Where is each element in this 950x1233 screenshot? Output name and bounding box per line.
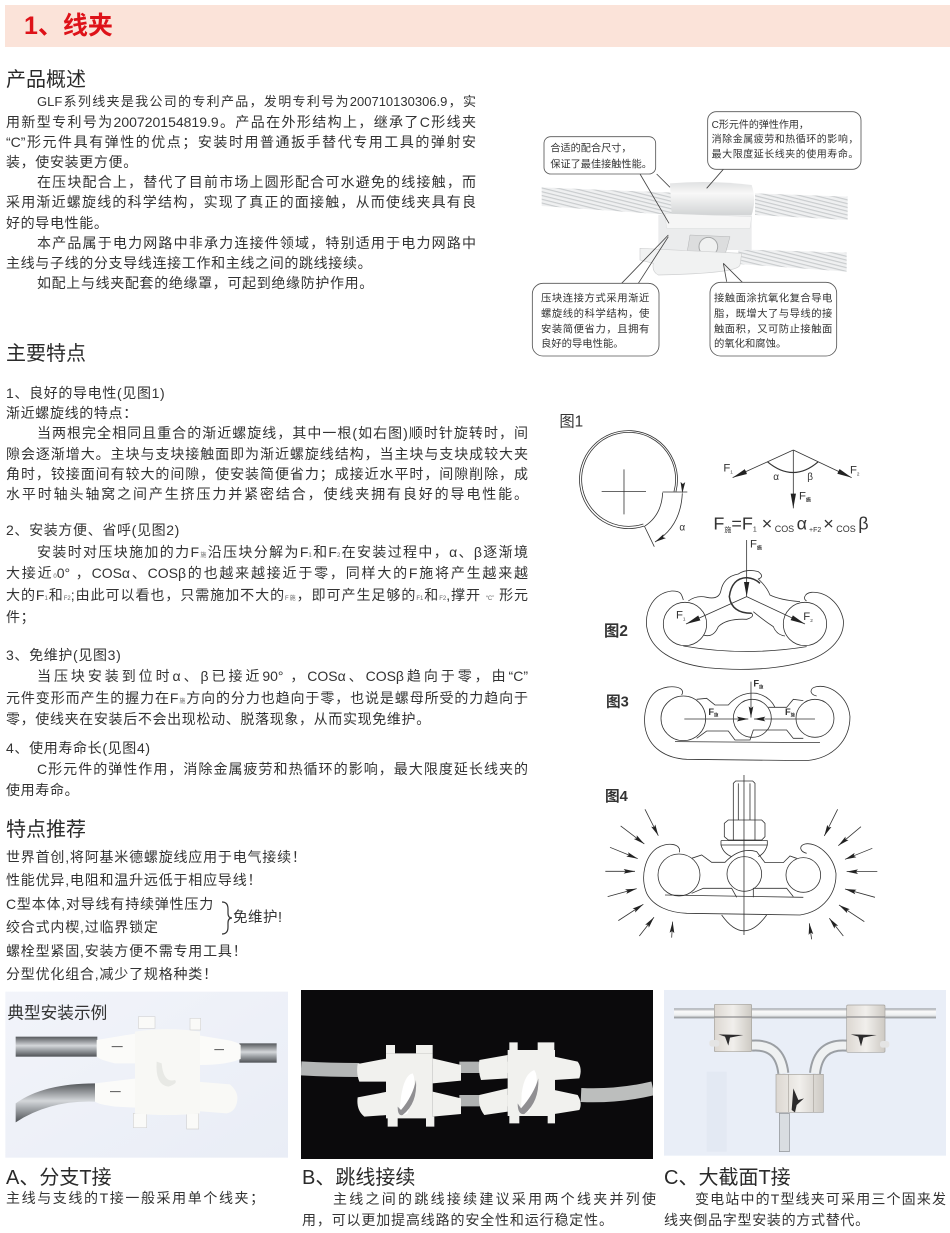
- figure 2: [604, 538, 843, 669]
- figure 3: F: [785, 707, 791, 717]
- text block: feature 4: 4、使用寿命长(见图4): [6, 740, 151, 756]
- figure 3: 施: [759, 683, 764, 690]
- text block: feature 1: 当两根完全相同且重合的渐近螺旋线，其中一根(如右图)顺时针旋转时，间: [37, 425, 528, 441]
- caption B text: [302, 1191, 656, 1228]
- caption C heading: C、大截面T接: [664, 1167, 791, 1189]
- force vectors: [723, 450, 860, 508]
- text block: product overview: 主线与子线的分支导线连接工作和主线之间的跳线接续。: [6, 255, 372, 271]
- formula: F: [713, 513, 724, 533]
- clamp body: [640, 182, 754, 275]
- photo C: large section T connection: [664, 990, 946, 1156]
- formula: ×: [823, 513, 834, 533]
- figures 3 and 4 group: [605, 679, 877, 939]
- formula: =F: [731, 513, 753, 533]
- callout: press block: 压块连接方式采用渐近: [541, 292, 649, 305]
- figure 2: 1: [683, 616, 686, 621]
- figure 3: 图3: [606, 694, 629, 711]
- figure 4: 图4: [605, 788, 629, 805]
- jumper clamp right: [479, 1042, 581, 1123]
- figure 3: F: [753, 679, 759, 689]
- title text: 1、线夹: [24, 12, 113, 40]
- figure 3: 施: [791, 712, 796, 719]
- text block: feature 3: 元件变形而产生的握力在F施方向的分力也趋向于零，也说是螺母所受的力趋向于: [6, 690, 528, 706]
- text block: feature 3: 3、免维护(见图3): [6, 647, 121, 663]
- figure 2: F: [750, 538, 757, 550]
- heading: recommended features: 特点推荐: [6, 819, 86, 841]
- formula: ×: [757, 513, 772, 533]
- formula: β: [858, 513, 869, 533]
- figure 3: [606, 679, 850, 761]
- text block: product overview: 好的导电性能。: [6, 215, 109, 231]
- caption B text: 主线之间的跳线接续建议采用两个线夹并列使: [333, 1191, 656, 1207]
- force vectors: 2: [857, 471, 860, 476]
- brace: maintenance free: [222, 901, 283, 935]
- text block: feature 4: C形元件的弹性作用，消除金属疲劳和热循环的影响，最大限度延长线夹的: [37, 761, 528, 777]
- jumper clamp left: [357, 1045, 461, 1127]
- caption C: [664, 1167, 946, 1228]
- force vectors: F: [799, 490, 806, 502]
- force vectors: 1: [730, 470, 733, 475]
- text block: recommended list: C型本体,对导线有持续弹性压力: [6, 896, 214, 912]
- caption A heading: A、分支T接: [6, 1167, 112, 1189]
- text block: feature 1: 渐近螺旋线的特点：: [6, 405, 138, 421]
- label: figure 1: 图1: [559, 414, 583, 431]
- text block: recommended list: [6, 849, 307, 982]
- text block: feature 2: 安装时对压块施加的力F施沿压块分解为F1和F2在安装过程中，α、β逐渐境: [37, 544, 528, 560]
- text block: recommended list: 绞合式内楔,过临界锁定: [6, 919, 159, 935]
- text block: feature 1: [6, 385, 528, 502]
- callout: press block: [532, 235, 668, 356]
- formula: 施: [724, 525, 731, 534]
- heading: main features: 主要特点: [6, 343, 86, 365]
- callout: C-shaped element: 最大限度延长线夹的使用寿命。: [712, 147, 858, 160]
- title banner: [5, 5, 950, 47]
- callout: press block: 安装简便省力，且拥有: [541, 322, 649, 335]
- clamp bottom: [776, 1074, 823, 1112]
- callout: contact surface: 接触面涂抗氧化复合导电: [714, 292, 832, 305]
- force vectors: α: [773, 472, 779, 483]
- text block: feature 2: 件；: [6, 609, 35, 625]
- text block: feature 2: 大接近00° ，COSα、COSβ的也越来越接近于零，同样大的F施将产生越来越: [6, 565, 528, 581]
- callout: contact surface: 的氧化和腐蚀。: [714, 337, 786, 350]
- text block: recommended list: 螺栓型紧固,安装方便不需专用工具！: [6, 943, 248, 959]
- figure 3: 施: [714, 712, 719, 719]
- figure 1 group: [559, 414, 869, 669]
- figure 2: F: [803, 611, 810, 623]
- brace: maintenance free: 免维护!: [233, 909, 283, 926]
- product photo with callouts: [532, 111, 862, 356]
- text block: product overview: 采用渐近螺旋线的科学结构，实现了真正的面接触，从而使线夹具有良: [6, 194, 476, 210]
- callout: press block: 螺旋线的科学结构，使: [541, 307, 650, 320]
- label: typical installations: 典型安装示例: [7, 1003, 107, 1022]
- spiral circle: [579, 431, 687, 547]
- text block: product overview: 用新型专利号为200720154819.9。产品在外形结构上，继承了C形线夹: [6, 114, 476, 130]
- text block: recommended list: 性能优异,电阻和温升远低于相应导线！: [6, 872, 262, 888]
- text block: feature 3: 零，使线夹在安装后不会出现松动、脱落现象，从而实现免维护。: [6, 711, 431, 727]
- figure 2: 2: [810, 618, 813, 623]
- text block: feature 4: 使用寿命。: [6, 782, 79, 798]
- cable: lower: [738, 249, 847, 272]
- text block: product overview: 在压块配合上，替代了目前市场上圆形配合可水避免的线接触，而: [37, 174, 476, 190]
- text block: product overview: 如配上与线夹配套的绝缘罩，可起到绝缘防护作用。: [37, 275, 374, 291]
- callout: contact surface: 触面积，又可防止接触面: [714, 322, 832, 335]
- caption A: [6, 1167, 266, 1206]
- callout: fit dimensions: [544, 137, 670, 223]
- formula: α: [797, 513, 807, 533]
- callout: fit dimensions: 保证了最佳接触性能。: [550, 157, 652, 170]
- force vectors: 施: [806, 496, 811, 503]
- clamp right: [847, 1005, 889, 1052]
- heading: product overview: 产品概述: [6, 69, 86, 91]
- force vectors: F: [723, 463, 730, 475]
- text block: feature 1: 隙会逐渐增大。主块与支块接触面即为渐近螺旋线结构，当主块与支块成较大夹: [6, 446, 528, 462]
- caption C text: [664, 1191, 946, 1228]
- photo B: jumper connection: [301, 990, 653, 1159]
- clamp left: [709, 1004, 752, 1052]
- figure 2: F: [676, 609, 683, 621]
- text block: feature 2: 2、安装方便、省呼(见图2): [6, 522, 180, 538]
- text block: product overview: GLF系列线夹是我公司的专利产品，发明专利号为200710130306.9，实: [37, 94, 476, 109]
- formula: +F2: [807, 527, 823, 534]
- caption B text: 用，可以更加提高线路的安全性和运行稳定性。: [302, 1212, 614, 1228]
- alpha label: α: [679, 523, 685, 534]
- figure 3: F: [708, 707, 714, 717]
- caption A text: 主线与支线的T接一般采用单个线夹；: [6, 1190, 266, 1206]
- caption C text: 线夹倒品字型安装的方式替代。: [664, 1212, 870, 1228]
- force vectors: F: [850, 464, 857, 476]
- callout: contact surface: 脂，既增大了与导线的接: [714, 307, 832, 320]
- formula: 1: [753, 526, 757, 533]
- text block: product overview: [6, 94, 476, 291]
- formula: COS: [772, 524, 797, 534]
- text block: product overview: 本产品属于电力网路中非承力连接件领域，特别适用于电力网路中: [37, 235, 476, 251]
- text block: feature 3: 当压块安装到位时α、β已接近90° ，COSα、COSβ趋向于零，由“C”: [37, 668, 528, 684]
- text block: product overview: “C”形元件具有弹性的优点；安装时用普通扳手替代专用工具的弹射安: [6, 134, 476, 150]
- text block: feature 4: [6, 740, 528, 798]
- figure 4: [605, 775, 877, 939]
- callout: fit dimensions: 合适的配合尺寸，: [550, 142, 632, 155]
- callout: press block: 良好的导电性能。: [541, 337, 624, 350]
- text block: feature 3: [6, 647, 528, 727]
- caption C text: 变电站中的T型线夹可采用三个固来发: [695, 1191, 946, 1207]
- figure 2: 图2: [604, 623, 628, 640]
- caption B: [302, 1167, 656, 1228]
- callout: C-shaped element: [707, 112, 861, 188]
- callout: C-shaped element: C形元件的弹性作用，: [712, 118, 809, 131]
- text block: recommended list: 分型优化组合,减少了规格种类！: [6, 966, 218, 982]
- formula: COS: [834, 524, 858, 534]
- text block: feature 1: 水平时轴头轴窝之间产生挤压力并紧密结合，使线夹拥有良好的导电性能。: [6, 486, 528, 502]
- photo A: branch T connection: [6, 992, 288, 1158]
- diagrams: figures 1 to 4: [559, 414, 878, 940]
- text block: feature 2: 大的F1和F2;由此可以看也，只需施加不大的F施，即可产生足够的F1和F2,撑开 “C” 形元: [6, 587, 528, 603]
- text block: feature 1: 1、良好的导电性(见图1): [6, 385, 165, 401]
- text block: feature 1: 角时，铰接面间有较大的间隙，使安装简便省力；成接近水平时，间隙削除，成: [6, 466, 528, 482]
- callout: contact surface: [710, 263, 837, 356]
- callout: C-shaped element: 消除金属疲劳和热循环的影响，: [712, 133, 858, 146]
- cable: upper: [542, 187, 848, 220]
- text block: feature 2: [6, 522, 528, 625]
- force vectors: β: [807, 472, 813, 483]
- caption B heading: B、跳线接续: [302, 1167, 415, 1189]
- figure 2: 施: [757, 544, 762, 551]
- text block: recommended list: 世界首创,将阿基米德螺旋线应用于电气接续！: [6, 849, 307, 865]
- text block: product overview: 装，使安装更方便。: [6, 154, 138, 170]
